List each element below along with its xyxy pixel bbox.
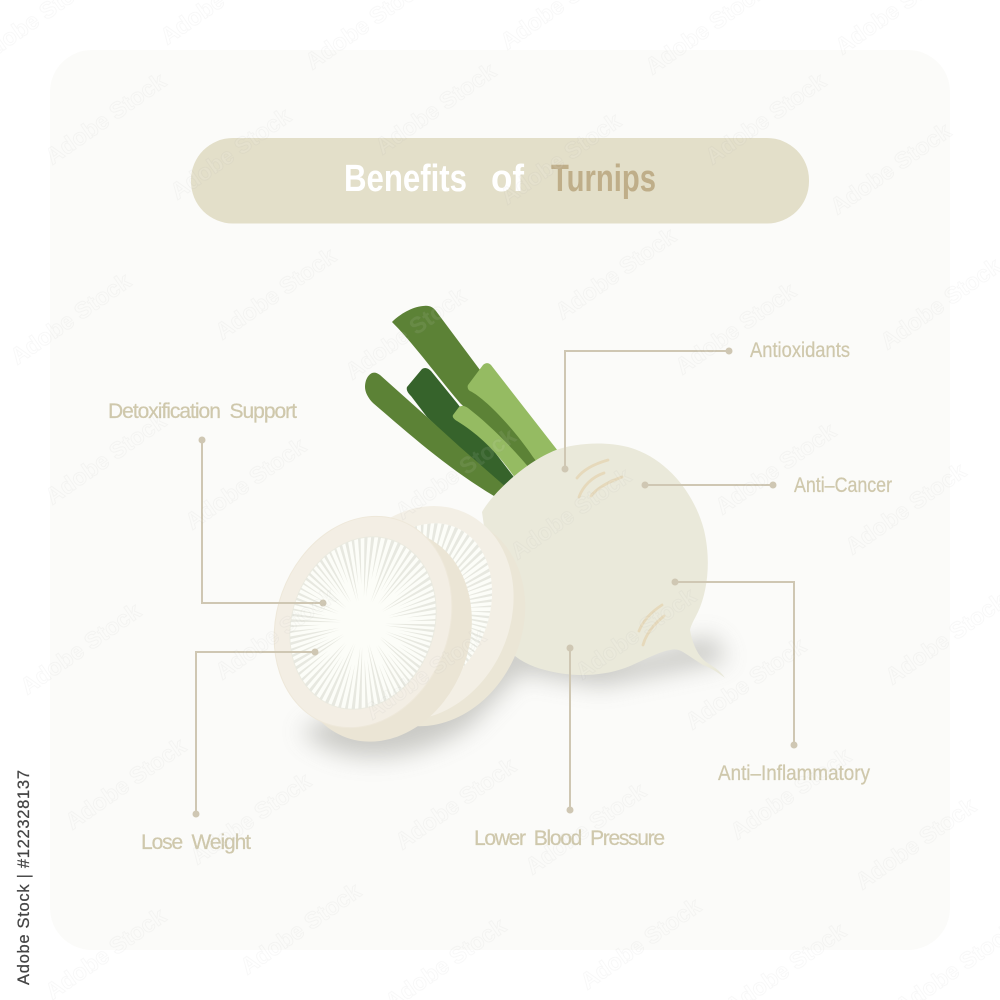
watermarks: Adobe Stock	[840, 457, 971, 559]
watermarks: Adobe Stock	[360, 622, 491, 724]
callout: Anti-Inflammatory	[672, 578, 870, 785]
callout: Antioxidants	[562, 339, 850, 472]
watermarks: Adobe Stock	[520, 777, 651, 879]
leaf stalks	[365, 306, 565, 505]
callout: Detoxification Support: Detoxification Support	[108, 400, 297, 423]
title pill: Benefits	[344, 158, 467, 200]
watermarks: Adobe Stock	[550, 222, 681, 324]
watermarks: Adobe Stock	[40, 407, 171, 509]
watermarks: Adobe Stock	[495, 107, 626, 209]
callout: Lose Weight: Lose Weight	[141, 831, 251, 854]
callout: Anti-Cancer	[642, 474, 892, 497]
watermarks: Adobe Stock	[180, 432, 311, 534]
watermarks: Adobe Stock	[670, 277, 801, 379]
stock id text: Adobe Stock | #122328137	[15, 770, 33, 985]
title pill: of	[491, 158, 524, 200]
ground shadow	[300, 636, 728, 757]
watermarks: Adobe Stock	[60, 732, 191, 834]
callout: Lose Weight	[141, 648, 318, 854]
watermarks: Adobe Stock	[710, 417, 841, 519]
title pill	[191, 138, 809, 224]
watermarks: Adobe Stock	[725, 742, 856, 844]
watermarks: Adobe Stock	[235, 877, 366, 979]
watermarks: Adobe Stock	[850, 792, 981, 894]
turnip skin marks	[577, 460, 664, 645]
front slice	[274, 516, 472, 742]
illustration: turnip and slices	[225, 306, 728, 767]
watermarks: Adobe Stock	[185, 767, 316, 869]
callout: Lower Blood Pressure: Lower Blood Pressure	[474, 827, 665, 850]
title pill: Turnips	[551, 158, 656, 200]
back slice	[391, 506, 515, 726]
watermarks: Adobe Stock	[390, 422, 521, 524]
watermarks: Adobe Stock	[700, 67, 831, 169]
watermarks: Adobe Stock	[570, 582, 701, 684]
watermarks: Adobe Stock	[340, 282, 471, 384]
watermarks: Adobe Stock	[825, 117, 956, 219]
watermarks: Adobe Stock	[210, 582, 341, 684]
callout: Antioxidants: Antioxidants	[750, 339, 850, 362]
watermarks: Adobe Stock	[680, 632, 811, 734]
callout: Anti-Cancer: Anti–Cancer	[794, 474, 892, 497]
watermarks: Adobe Stock	[40, 67, 171, 169]
watermarks: Adobe Stock	[575, 892, 706, 994]
callout: Lower Blood Pressure	[474, 644, 665, 850]
callout: Detoxification Support	[108, 400, 326, 606]
watermarks: Adobe Stock	[15, 597, 146, 699]
watermarks: Adobe Stock	[390, 752, 521, 854]
watermarks: Adobe Stock	[505, 462, 636, 564]
watermarks: Adobe Stock	[165, 102, 296, 204]
watermarks: Adobe Stock	[370, 57, 501, 159]
watermarks: Adobe Stock	[210, 242, 341, 344]
watermarks: Adobe Stock	[5, 267, 136, 369]
callout: Anti-Inflammatory: Anti–Inflammatory	[718, 762, 870, 785]
turnip body	[482, 443, 725, 678]
